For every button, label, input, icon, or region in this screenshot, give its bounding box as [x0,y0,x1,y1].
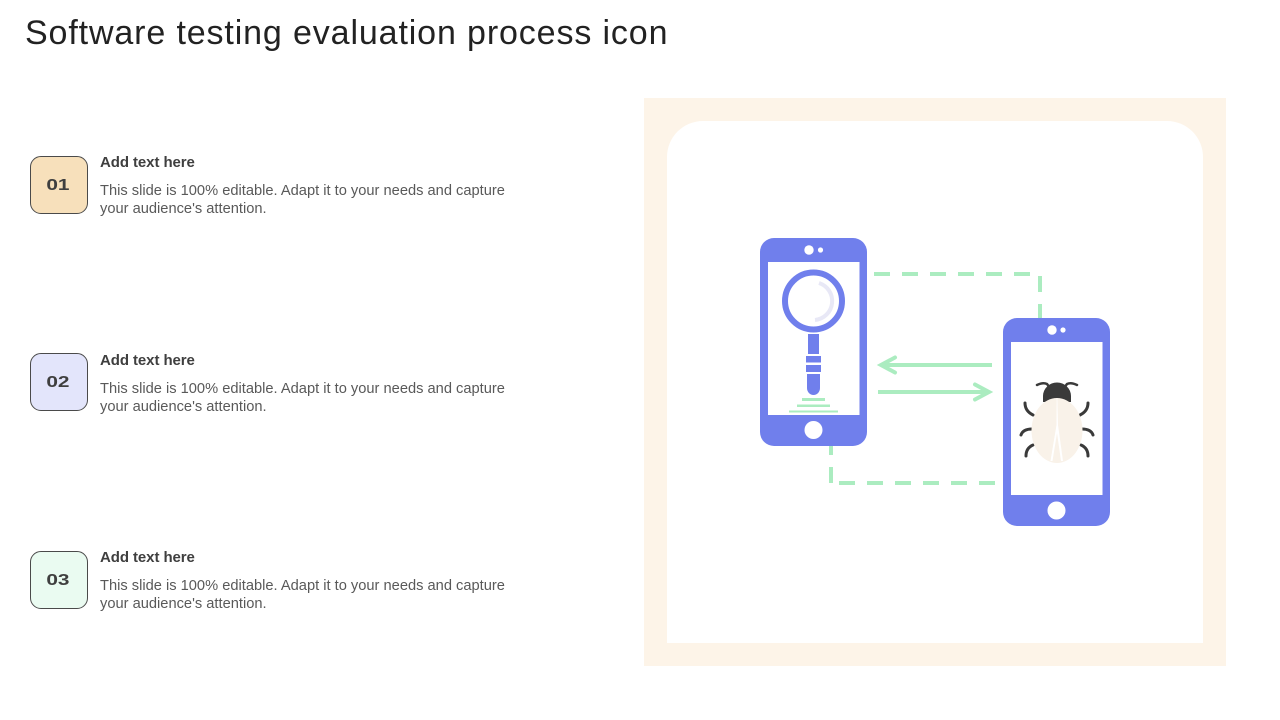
text 03: your audience's attention. [100,596,267,612]
item 01 [30,154,505,217]
dashed connector: bottom [829,446,995,485]
text 03 [100,578,505,612]
text 03: This slide is 100% editable. Adapt it to your needs and capture [100,578,505,594]
heading 02: Add text here [100,352,195,369]
panel: white card [667,121,1203,643]
title: Software testing evaluation process icon [25,14,668,52]
text 02: This slide is 100% editable. Adapt it to your needs and capture [100,381,505,397]
arrow: right [878,384,989,400]
text 01: This slide is 100% editable. Adapt it to your needs and capture [100,183,505,199]
icon: phone with magnifier [760,238,867,446]
text 02 [100,381,505,415]
icon: phone with bug [1003,318,1110,526]
text 01: your audience's attention. [100,201,267,217]
icon: magnifier shadow lines [789,398,838,412]
arrow: left [881,358,992,372]
text 01 [100,183,505,217]
text 02: your audience's attention. [100,399,267,415]
icon: bug [1021,382,1093,463]
badge 01: 01 [46,177,70,194]
dashed connector: top [874,272,1042,319]
heading 01: Add text here [100,154,195,171]
item 02 [30,352,505,415]
icon: magnifier [785,272,842,395]
item 03 [30,549,505,612]
badge 02: 02 [46,374,70,391]
heading 03: Add text here [100,549,195,566]
badge 02 [30,353,88,411]
panel: cream frame [644,98,1226,666]
badge 03 [30,551,88,609]
badge 01 [30,156,88,214]
badge 03: 03 [46,572,70,589]
